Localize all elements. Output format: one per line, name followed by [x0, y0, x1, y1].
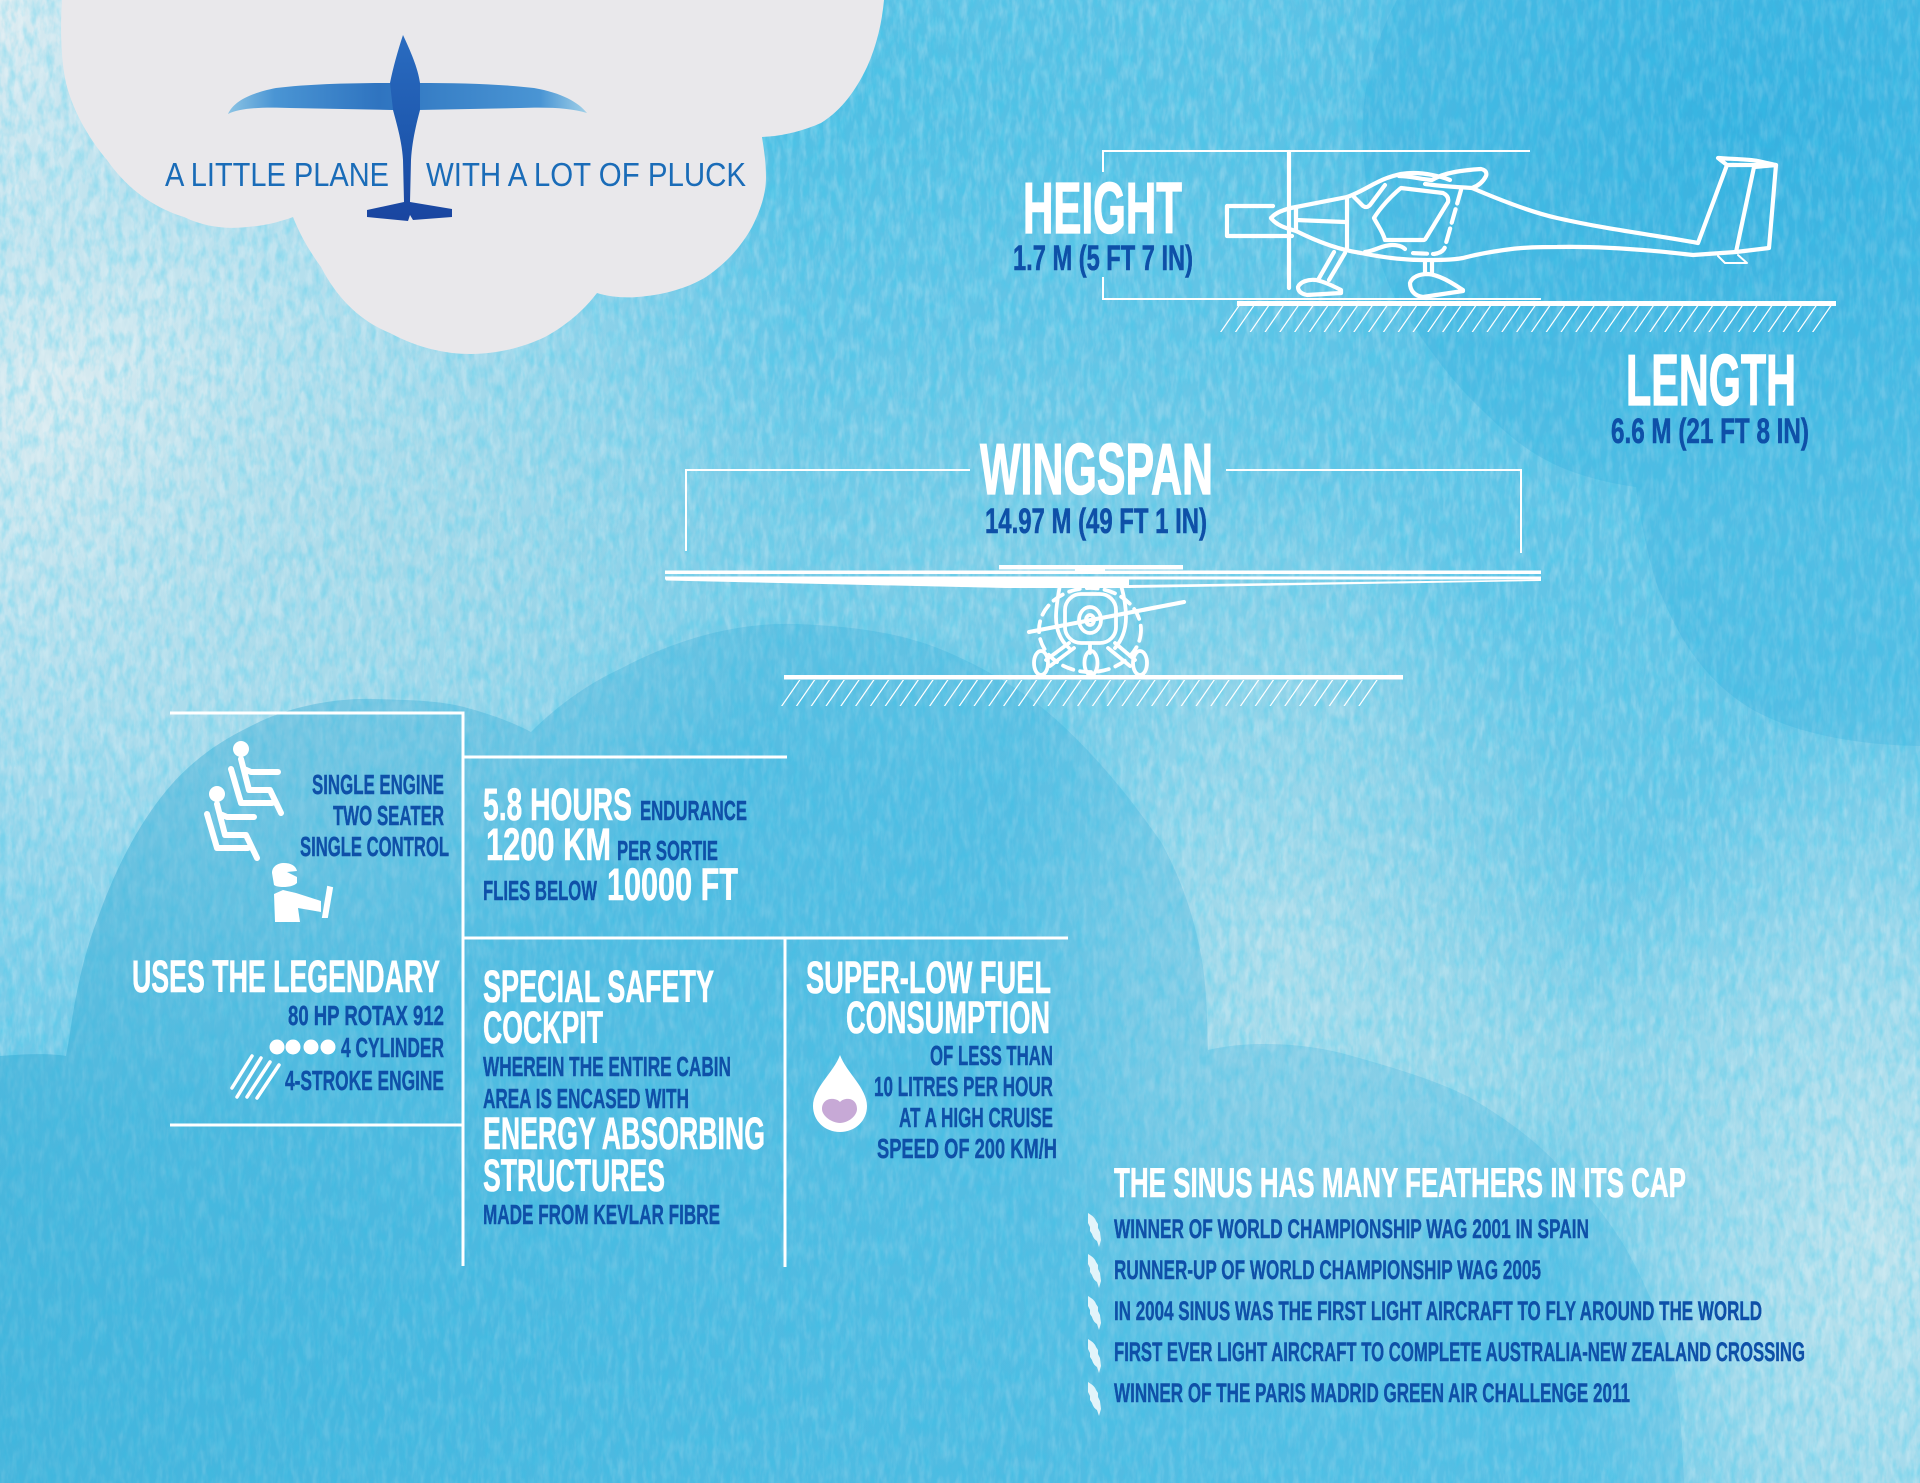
panel: engine: 4-STROKE ENGINE	[285, 1065, 444, 1096]
panel: endurance: ENDURANCE	[640, 795, 747, 826]
panel: engine: 80 HP ROTAX 912	[288, 1000, 444, 1031]
plane outline	[1271, 158, 1776, 297]
wingspan label	[980, 430, 1213, 541]
panel: safety cockpit: AREA IS ENCASED WITH	[483, 1083, 689, 1114]
panel: engine: 4 CYLINDER	[341, 1032, 444, 1063]
panel grid lines	[170, 713, 1068, 1267]
awards list: RUNNER-UP OF WORLD CHAMPIONSHIP WAG 2005	[1114, 1255, 1541, 1285]
height label	[1013, 169, 1193, 278]
length label	[1611, 341, 1809, 451]
propeller and prop box	[1227, 152, 1292, 288]
panel: fuel consumption	[806, 952, 1057, 1164]
tagline: A LITTLE PLANE	[165, 156, 389, 193]
height label: 1.7 M (5 FT 7 IN)	[1013, 239, 1193, 278]
panel: safety cockpit: SPECIAL SAFETY	[483, 961, 714, 1012]
seating text: TWO SEATER	[333, 800, 444, 831]
panel: seating	[207, 741, 449, 922]
panel: safety cockpit: STRUCTURES	[483, 1150, 665, 1201]
icon: four cylinders	[270, 1040, 336, 1054]
panel: endurance: 5.8 HOURS	[483, 779, 632, 830]
wingspan label: 14.97 M (49 FT 1 IN)	[985, 502, 1207, 541]
seating text: SINGLE ENGINE	[312, 769, 444, 800]
awards list	[1114, 1214, 1805, 1408]
panel: fuel consumption: OF LESS THAN	[930, 1040, 1053, 1071]
icon: two seated people	[207, 741, 281, 858]
ground with hatching	[784, 675, 1403, 680]
wingspan bracket	[686, 470, 1521, 553]
panel: endurance: 10000 FT	[607, 859, 738, 910]
front view plane	[665, 565, 1541, 675]
panel: fuel consumption: 10 LITRES PER HOUR	[874, 1071, 1053, 1102]
overlay cloud: bottom left	[0, 624, 1684, 1483]
wingspan label: WINGSPAN	[980, 430, 1213, 510]
height bracket	[1103, 151, 1541, 299]
panel: endurance: 1200 KM	[486, 819, 611, 870]
height label: HEIGHT	[1023, 169, 1182, 249]
seating text: SINGLE CONTROL	[300, 831, 449, 862]
panel: endurance	[483, 779, 747, 910]
panel: safety cockpit	[483, 961, 765, 1230]
panel: awards	[1088, 1159, 1805, 1416]
panel: fuel consumption: SUPER-LOW FUEL	[806, 952, 1051, 1003]
panel: fuel consumption: CONSUMPTION	[846, 992, 1050, 1043]
overlay cloud: top right	[1362, 0, 1920, 746]
panel: engine: USES THE LEGENDARY	[132, 951, 440, 1002]
icon: fuel drop with heart	[813, 1055, 867, 1132]
panel: safety cockpit: COCKPIT	[483, 1002, 603, 1053]
seating text	[300, 769, 449, 862]
panel: fuel consumption: AT A HIGH CRUISE	[899, 1102, 1053, 1133]
awards list: WINNER OF THE PARIS MADRID GREEN AIR CHALLENGE 2011	[1114, 1378, 1630, 1408]
panel: safety cockpit: ENERGY ABSORBING	[483, 1108, 765, 1159]
panel: endurance: PER SORTIE	[617, 835, 718, 866]
icon: glider seen from above	[228, 35, 587, 221]
diagram: front view of plane with wingspan	[665, 430, 1541, 693]
length label: LENGTH	[1626, 341, 1796, 421]
awards list: WINNER OF WORLD CHAMPIONSHIP WAG 2001 IN SPAIN	[1114, 1214, 1589, 1244]
panel: safety cockpit: MADE FROM KEVLAR FIBRE	[483, 1199, 720, 1230]
icons: feathers	[1088, 1213, 1101, 1416]
panel: safety cockpit: WHEREIN THE ENTIRE CABIN	[483, 1051, 731, 1082]
tagline	[165, 156, 746, 193]
length label: 6.6 M (21 FT 8 IN)	[1611, 412, 1809, 451]
tagline: WITH A LOT OF PLUCK	[426, 156, 746, 193]
icon: four strokes	[232, 1056, 279, 1098]
icon: pilot at the controls	[272, 863, 332, 922]
panel: endurance: FLIES BELOW	[483, 875, 597, 906]
panel: engine	[132, 951, 444, 1098]
diagram: side view of plane with height and length	[1013, 151, 1836, 451]
title cloud with plane and tagline	[61, 0, 884, 354]
panel: fuel consumption: SPEED OF 200 KM/H	[877, 1133, 1057, 1164]
ground with hatching	[1237, 301, 1836, 306]
